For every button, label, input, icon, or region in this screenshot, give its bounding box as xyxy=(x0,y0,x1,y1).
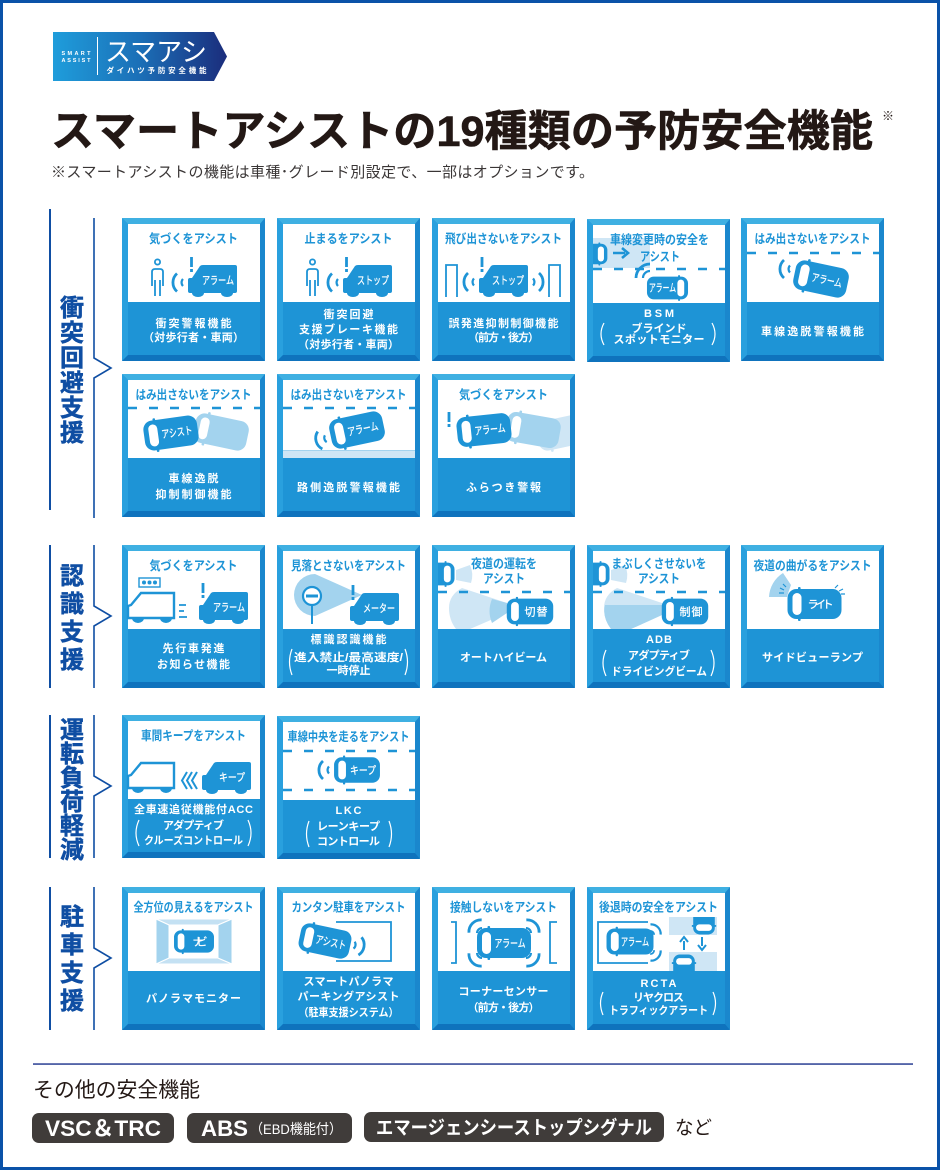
card: blind spot monitor xyxy=(587,219,730,362)
card: collision avoidance brake: 支援ブレーキ機能 xyxy=(299,322,398,336)
icon: walls xyxy=(446,265,560,297)
icon: van stop xyxy=(343,265,392,297)
logo: Smart Assist badge: スマアシ xyxy=(105,37,207,67)
icon: van alarm: アラーム xyxy=(202,274,234,287)
title: スマートアシストの19種類の予防安全機能 xyxy=(51,108,873,156)
section: driving load reduction xyxy=(50,715,111,864)
card: corner sensor: 接触しないをアシスト xyxy=(450,900,557,914)
card: lane departure suppression: アシスト xyxy=(161,425,193,441)
icon: car alarm xyxy=(647,275,688,301)
card: smart panorama parking assist: スマートパノラマ xyxy=(304,975,394,988)
card: side view lamp: 夜道の曲がるをアシスト xyxy=(754,558,872,573)
card: wobble warning: アラーム xyxy=(474,422,506,438)
card: adaptive cruise control: キープ xyxy=(219,771,245,784)
card: collision avoidance brake xyxy=(277,218,420,361)
card: smart panorama parking assist: パーキングアシスト xyxy=(298,989,400,1003)
card: rear cross traffic alert: アラーム xyxy=(621,936,649,948)
card: traffic sign recognition xyxy=(277,545,420,688)
logo: Smart Assist badge: ダイハツ予防安全機能 xyxy=(106,65,207,75)
card: collision warning: 気づくをアシスト xyxy=(149,231,238,246)
pill: ABS xyxy=(187,1113,352,1143)
card: collision warning xyxy=(122,218,265,361)
card: lead car departure notice: アラーム xyxy=(213,601,245,614)
section: parking: 駐 xyxy=(60,904,84,931)
card: lane keep control: 車線中央を走るをアシスト xyxy=(288,729,410,744)
section: collision avoidance: 避 xyxy=(60,370,84,397)
card: traffic sign recognition: 見落とさないをアシスト xyxy=(291,558,406,573)
card: lane departure suppression: 車線逸脱 xyxy=(168,471,218,485)
card: traffic sign recognition: 標識認識機能 xyxy=(310,632,386,646)
section: driving load reduction: 負 xyxy=(60,765,84,792)
card: corner sensor: コーナーセンサー xyxy=(458,985,548,998)
section: collision avoidance: 突 xyxy=(60,320,84,347)
logo: Smart Assist badge: ASSIST xyxy=(62,58,91,64)
card: collision avoidance brake: 止まるをアシスト xyxy=(304,231,392,246)
card: adaptive driving beam: 制御 xyxy=(680,604,702,618)
card: blind spot monitor: アシスト xyxy=(640,250,680,264)
icon: arrows xyxy=(680,937,706,950)
section: parking: 車 xyxy=(60,932,84,959)
card: lane keep control: LKC xyxy=(336,805,362,817)
icon: lamp wedge xyxy=(769,573,791,597)
card: lane departure warning: アラーム xyxy=(810,271,843,290)
card: rear cross traffic alert: RCTA xyxy=(640,978,677,990)
card: lead car departure notice: 先行車発進 xyxy=(162,641,224,655)
pill: emergency stop signal: エマージェンシーストップシグナル xyxy=(376,1116,652,1139)
card: adaptive driving beam: アシスト xyxy=(638,572,680,586)
divider xyxy=(33,1063,913,1065)
card: side view lamp: サイドビューランプ xyxy=(762,650,863,664)
card: lead car departure notice xyxy=(122,545,265,688)
card: wobble warning xyxy=(432,374,575,517)
icon: car alarm: アラーム xyxy=(649,282,676,294)
section: collision avoidance: 支 xyxy=(60,395,84,422)
section: recognition: 援 xyxy=(60,647,84,674)
card: adaptive cruise control: 車間キープをアシスト xyxy=(141,728,246,743)
icon: radar arc xyxy=(636,264,650,278)
card: adaptive driving beam: アダプティブ xyxy=(628,648,690,662)
card: auto high beam xyxy=(432,545,575,688)
icon: camera beam xyxy=(294,574,362,616)
card: lane keep control: キープ xyxy=(350,764,376,777)
section: parking: 支 xyxy=(60,960,84,987)
card: false start suppression: 誤発進抑制制御機能 xyxy=(448,316,558,330)
section: recognition xyxy=(50,545,111,688)
card: traffic sign recognition: メーター xyxy=(363,602,395,615)
card: rear cross traffic alert xyxy=(587,887,730,1030)
section: collision avoidance xyxy=(50,209,111,518)
subtitle note: ※スマートアシストの機能は車種･グレード別設定で、一部はオプションです。 xyxy=(51,164,594,181)
pill: VSC & TRC: VSC＆TRC xyxy=(45,1116,161,1141)
card: adaptive cruise control: アダプティブ xyxy=(163,818,224,832)
card: lane keep control: レーンキープ xyxy=(317,820,380,833)
card: lane departure warning: 車線逸脱警報機能 xyxy=(761,324,864,338)
card: collision avoidance brake: （対歩行者・車両） xyxy=(298,337,399,351)
card: wobble warning: 気づくをアシスト xyxy=(459,387,548,402)
card: smart panorama parking assist xyxy=(277,887,420,1030)
section: driving load reduction: 減 xyxy=(60,837,84,864)
card: rear cross traffic alert: トラフィックアラート xyxy=(609,1004,708,1017)
card: blind spot monitor: 車線変更時の安全を xyxy=(610,232,709,247)
card: auto high beam: アシスト xyxy=(483,572,525,586)
card: adaptive driving beam: まぶしくさせないを xyxy=(612,557,706,571)
section: parking xyxy=(50,887,111,1030)
icon: van alarm xyxy=(188,265,237,297)
card: collision warning: 衝突警報機能 xyxy=(156,316,232,330)
card: adaptive driving beam: ADB xyxy=(646,634,672,646)
card: adaptive cruise control xyxy=(122,715,265,858)
card: adaptive cruise control: 全車速追従機能付ACC xyxy=(134,802,253,816)
card: false start suppression: ストップ xyxy=(492,274,524,287)
card: wobble warning: ふらつき警報 xyxy=(466,480,541,494)
pill: ABS: ABS xyxy=(201,1116,248,1141)
icon: arrow xyxy=(613,248,628,258)
card: traffic sign recognition: 一時停止 xyxy=(326,663,370,677)
icon: van stop: ストップ xyxy=(357,274,389,287)
card: collision avoidance brake: 衝突回避 xyxy=(324,307,374,321)
card: lane departure warning xyxy=(741,218,884,361)
card: false start suppression xyxy=(432,218,575,361)
card: roadside departure warning: アラーム xyxy=(346,420,379,439)
section: driving load reduction: 運 xyxy=(60,717,84,744)
card: side view lamp xyxy=(741,545,884,688)
section: driving load reduction: 軽 xyxy=(60,813,84,840)
card: blind spot monitor: スポットモニター xyxy=(614,333,704,346)
icon: panorama view xyxy=(156,919,232,964)
text: etc: など xyxy=(675,1117,712,1139)
title footnote mark: ※ xyxy=(882,109,894,123)
section: recognition: 識 xyxy=(60,591,84,618)
card: lane departure suppression xyxy=(122,374,265,517)
card: lead car departure notice: 気づくをアシスト xyxy=(150,558,238,573)
icon: no-entry sign xyxy=(303,587,321,624)
card: auto high beam: 夜道の運転を xyxy=(471,556,537,571)
card: corner sensor xyxy=(432,887,575,1030)
card: panoramic monitor: 全方位の見えるをアシスト xyxy=(134,900,254,914)
card: false start suppression: 飛び出さないをアシスト xyxy=(445,232,562,246)
card: auto high beam: オートハイビーム xyxy=(460,650,547,664)
section: recognition: 支 xyxy=(60,619,84,646)
card: lane departure suppression: はみ出さないをアシスト xyxy=(136,388,252,402)
card: side view lamp: ライト xyxy=(808,599,834,611)
section: driving load reduction: 荷 xyxy=(60,789,84,816)
card: panoramic monitor xyxy=(122,887,265,1030)
pill: VSC & TRC xyxy=(32,1113,174,1143)
card: corner sensor: （前方・後方） xyxy=(468,1000,540,1014)
section: driving load reduction: 転 xyxy=(60,741,84,768)
card: lane keep control: コントロール xyxy=(317,836,380,848)
card: panoramic monitor: ナビ xyxy=(192,936,208,948)
card: auto high beam: 切替 xyxy=(524,604,548,618)
card: lane departure suppression: 抑制制御機能 xyxy=(156,487,232,501)
pill: ABS: （EBD機能付） xyxy=(250,1121,342,1137)
card: smart panorama parking assist: （駐車支援システム） xyxy=(298,1005,398,1019)
card: smart panorama parking assist: カンタン駐車をアシスト xyxy=(292,900,406,914)
card: adaptive driving beam xyxy=(587,545,730,688)
section: recognition: 認 xyxy=(60,563,84,590)
card: traffic sign recognition: 進入禁止/最高速度/ xyxy=(294,650,403,664)
section: parking: 援 xyxy=(60,988,84,1015)
card: lane departure warning: はみ出さないをアシスト xyxy=(754,232,870,246)
card: lead car departure notice: お知らせ機能 xyxy=(157,657,230,671)
section: collision avoidance: 援 xyxy=(60,420,84,447)
icon: pedestrian xyxy=(152,259,163,296)
card: adaptive cruise control: クルーズコントロール xyxy=(144,833,243,847)
pill: emergency stop signal xyxy=(364,1112,664,1142)
logo: Smart Assist badge: SMART xyxy=(62,51,91,57)
card: adaptive driving beam: ドライビングビーム xyxy=(611,664,707,678)
card: blind spot monitor: ブラインド xyxy=(632,321,686,335)
card: roadside departure warning xyxy=(277,374,420,517)
icon: traffic signal xyxy=(139,578,160,587)
section: collision avoidance: 回 xyxy=(60,345,84,372)
card: panoramic monitor: パノラマモニター xyxy=(146,992,241,1005)
card: roadside departure warning: 路側逸脱警報機能 xyxy=(297,480,400,494)
card: rear cross traffic alert: リヤクロス xyxy=(633,991,684,1004)
heading: other safety features: その他の安全機能 xyxy=(33,1079,200,1102)
card: blind spot monitor: BSM xyxy=(644,308,674,320)
logo: Smart Assist badge xyxy=(53,32,227,81)
card: collision warning: （対歩行者・車両） xyxy=(143,330,244,344)
card: lane keep control xyxy=(277,716,420,859)
card: corner sensor: アラーム xyxy=(494,937,526,950)
card: smart panorama parking assist: アシスト xyxy=(314,934,347,952)
card: false start suppression: （前方・後方） xyxy=(468,330,539,344)
card: rear cross traffic alert: 後退時の安全をアシスト xyxy=(599,900,718,914)
section: collision avoidance: 衝 xyxy=(60,295,84,322)
card: roadside departure warning: はみ出さないをアシスト xyxy=(290,388,406,402)
icon: chevrons xyxy=(182,772,197,789)
